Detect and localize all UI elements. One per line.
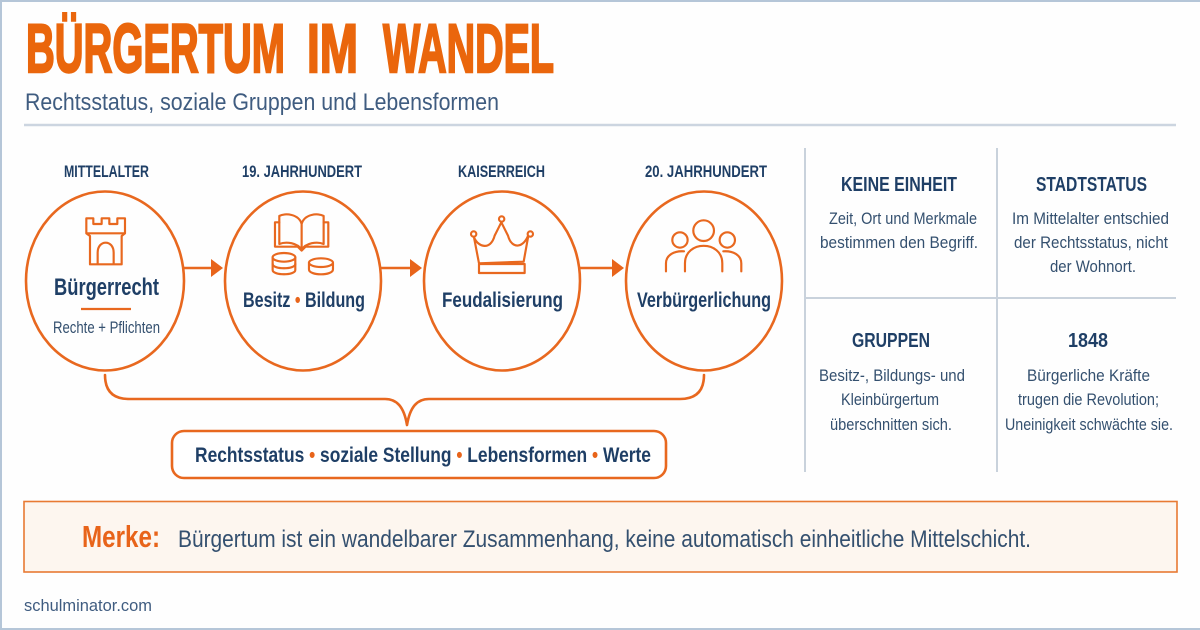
fact: Keine Einheit: KEINE EINHEIT: [841, 174, 957, 196]
panel: fact grid: [805, 148, 1176, 472]
fact: Stadtstatus: der Wohnort.: [1050, 258, 1136, 276]
era: 20. Jahrhundert: [626, 163, 782, 370]
fact: Stadtstatus: STADTSTATUS: [1036, 174, 1147, 196]
fact: Stadtstatus: der Rechtsstatus, nicht: [1014, 234, 1168, 252]
era label: MITTELALTER: [64, 163, 149, 181]
fact: Gruppen: Kleinbürgertum: [841, 391, 939, 409]
heading: Verbürgerlichung: [637, 288, 771, 312]
title: BÜRGERTUM: [26, 10, 285, 87]
era label: 20. JAHRHUNDERT: [645, 163, 767, 181]
era: Kaiserreich: [424, 163, 580, 370]
title: IM: [307, 10, 358, 87]
bracket connector: [105, 375, 704, 425]
fact: Keine Einheit: Zeit, Ort und Merkmale: [829, 210, 977, 228]
summary text: Rechtsstatus • soziale Stellung • Lebensformen • Werte: [195, 443, 651, 467]
fact: Gruppen: Besitz-, Bildungs- und: [819, 367, 965, 385]
icon: crown: [471, 216, 533, 273]
fact: Gruppen: GRUPPEN: [852, 330, 930, 352]
icon: book and coins: [273, 214, 333, 274]
arrow: [381, 259, 422, 277]
caption: Rechte + Pflichten: [53, 319, 160, 337]
fact: Keine Einheit: [820, 174, 978, 252]
panel: timeline: [26, 163, 782, 370]
circle: [225, 192, 381, 370]
circle: [626, 192, 782, 370]
fact: Gruppen: [819, 330, 965, 434]
arrow: [580, 259, 624, 277]
footer: schulminator.com: [24, 596, 152, 615]
callout: Merke: [24, 502, 1177, 572]
fact: 1848: 1848: [1068, 330, 1108, 352]
fact: 1848: trugen die Revolution;: [1018, 391, 1159, 409]
fact: Keine Einheit: bestimmen den Begriff.: [820, 234, 978, 252]
title: WANDEL: [383, 10, 554, 87]
era label: 19. JAHRHUNDERT: [242, 163, 362, 181]
fact: 1848: [1005, 330, 1173, 434]
fact: Stadtstatus: Im Mittelalter entschied: [1012, 210, 1169, 228]
fact: 1848: Bürgerliche Kräfte: [1027, 367, 1150, 385]
era: Mittelalter: [26, 163, 184, 370]
fact: Gruppen: überschnitten sich.: [830, 416, 952, 434]
circle: [424, 192, 580, 370]
era: 19. Jahrhundert: [225, 163, 381, 370]
heading: Bürgerrecht: [54, 274, 159, 301]
circle: [26, 192, 184, 370]
summary pill: [172, 431, 666, 478]
era label: KAISERREICH: [458, 163, 545, 181]
callout text: Bürgertum ist ein wandelbarer Zusammenhang, keine automatisch einheitliche Mittelschicht.: [178, 526, 1031, 553]
icon: people: [666, 220, 741, 271]
heading: Besitz • Bildung: [243, 288, 365, 312]
fact: Stadtstatus: [1012, 174, 1169, 276]
callout label: Merke:: [82, 519, 160, 554]
heading: Feudalisierung: [442, 288, 563, 312]
fact: 1848: Uneinigkeit schwächte sie.: [1005, 416, 1173, 434]
subtitle: Rechtsstatus, soziale Gruppen und Lebensformen: [25, 89, 499, 116]
arrow: [184, 259, 223, 277]
icon: castle tower: [86, 218, 125, 264]
